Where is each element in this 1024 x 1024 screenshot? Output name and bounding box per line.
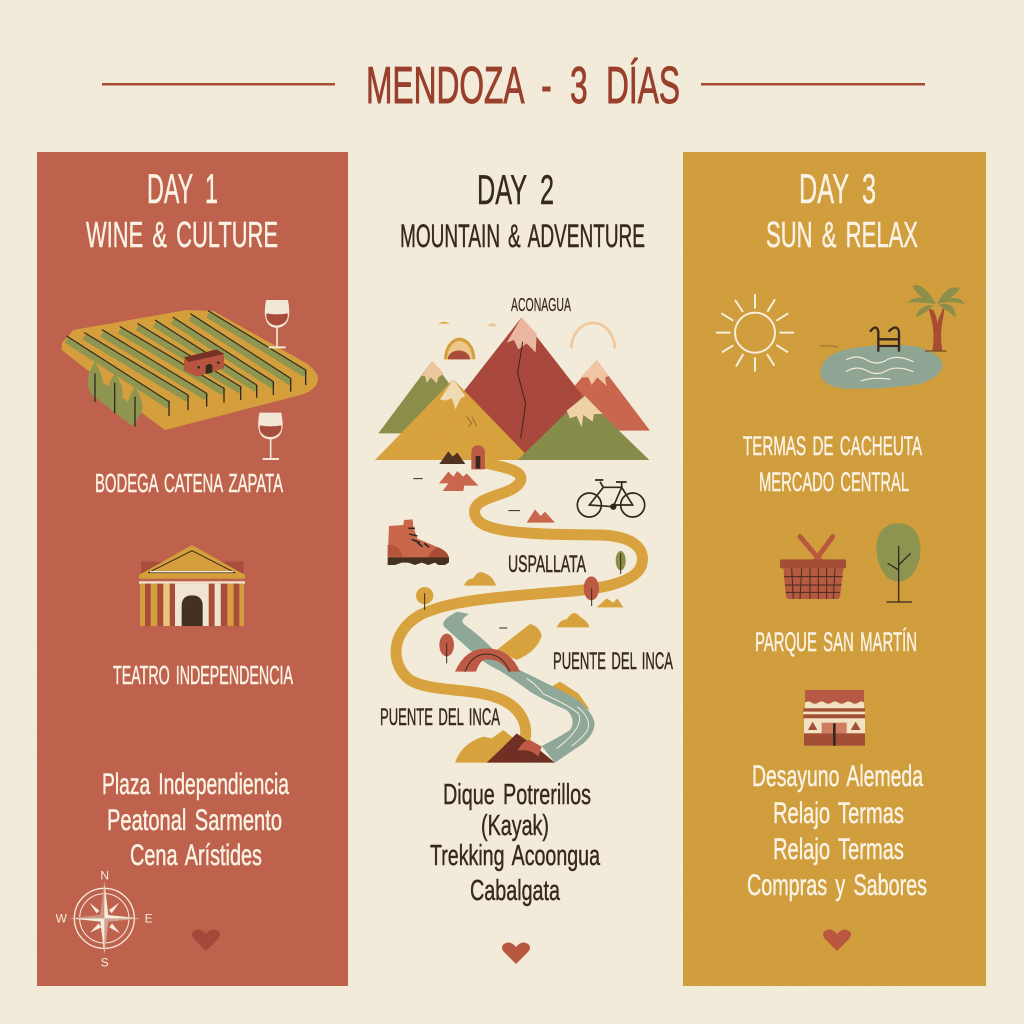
label: termas and mercado: [743, 431, 922, 497]
label: uspallata: USPALLATA: [508, 551, 586, 578]
title: MENDOZA - 3 DÍAS: [366, 57, 680, 115]
label: teatro: TEATRO INDEPENDENCIA: [113, 660, 293, 690]
day 2 list: Dique Potrerillos: [443, 779, 591, 811]
day 1 list: [102, 768, 289, 872]
label: bodega: BODEGA CATENA ZAPATA: [95, 468, 283, 498]
day 2 list: [430, 779, 601, 907]
icon: cypress trees: [88, 362, 143, 427]
day 3 heading: SUN & RELAX: [766, 214, 918, 255]
icon: picnic basket: [780, 537, 846, 599]
day 3 list: Desayuno Alemeda: [752, 760, 923, 793]
day 2 list: Trekking Acoongua: [430, 840, 601, 872]
day 1 heading: [86, 165, 278, 255]
river: [443, 612, 594, 763]
icon: winery house: [184, 349, 224, 377]
day 1 list: Cena Arístides: [130, 839, 262, 872]
day 2 heading: [400, 166, 645, 254]
day 2 list: Cabalgata: [470, 875, 561, 907]
icon: compass rose: S: [101, 956, 109, 970]
label: puente del inca right: PUENTE DEL INCA: [553, 648, 673, 675]
icon: bicycle: [577, 480, 645, 517]
illustration: small peaks and tunnel: [413, 445, 555, 523]
icon: market stall: [803, 690, 865, 746]
icons: small trees: [416, 551, 626, 663]
illustration: road: [396, 463, 643, 742]
icon: heart day 3: [823, 930, 851, 951]
label: aconagua: ACONAGUA: [511, 295, 571, 315]
icon: palm tree: [907, 285, 965, 351]
day 2 heading: MOUNTAIN & ADVENTURE: [400, 218, 645, 254]
day 3 list: Relajo Termas: [773, 797, 904, 830]
illustration: vineyard: [62, 310, 318, 430]
day 3 list: Relajo Termas: [773, 833, 904, 866]
icon: compass rose: E: [145, 911, 153, 925]
icon: compass rose: N: [100, 868, 109, 882]
icon: theatre: [139, 545, 245, 626]
panel: day 2: [375, 166, 673, 964]
icon: wine glass lower: [259, 413, 282, 459]
icon: compass rose: [56, 868, 153, 970]
icon: boot: [388, 519, 449, 565]
day 3 heading: [766, 165, 918, 255]
panel: day 1: [37, 152, 348, 986]
panel: day 3: [683, 152, 986, 986]
illustration: lower landscape: [388, 519, 626, 763]
icon: wine glass upper: [265, 301, 289, 347]
day 1 list: Plaza Independiencia: [102, 768, 289, 801]
icon: bridge: [455, 648, 520, 672]
icon: sun: [716, 294, 794, 372]
icon: heart day 1: [192, 930, 220, 951]
icon: heart day 2: [502, 943, 530, 964]
icon: pool: [820, 327, 943, 389]
icon: compass rose: W: [56, 911, 68, 925]
illustration: mountains: [375, 317, 650, 460]
icon: round tree: [876, 523, 920, 603]
day 2 list: (Kayak): [481, 810, 549, 842]
icon: setting sun: [444, 338, 475, 359]
day 3 heading: DAY 3: [799, 165, 876, 212]
day 1 heading: WINE & CULTURE: [86, 214, 278, 255]
day 1 heading: DAY 1: [147, 165, 218, 212]
day 2 heading: DAY 2: [477, 166, 554, 213]
day 1 list: Peatonal Sarmento: [107, 804, 282, 837]
day 3 list: [747, 760, 927, 902]
label: puente del inca left: PUENTE DEL INCA: [380, 704, 500, 731]
day 3 list: Compras y Sabores: [747, 869, 927, 902]
icons: bushes: [464, 572, 623, 627]
